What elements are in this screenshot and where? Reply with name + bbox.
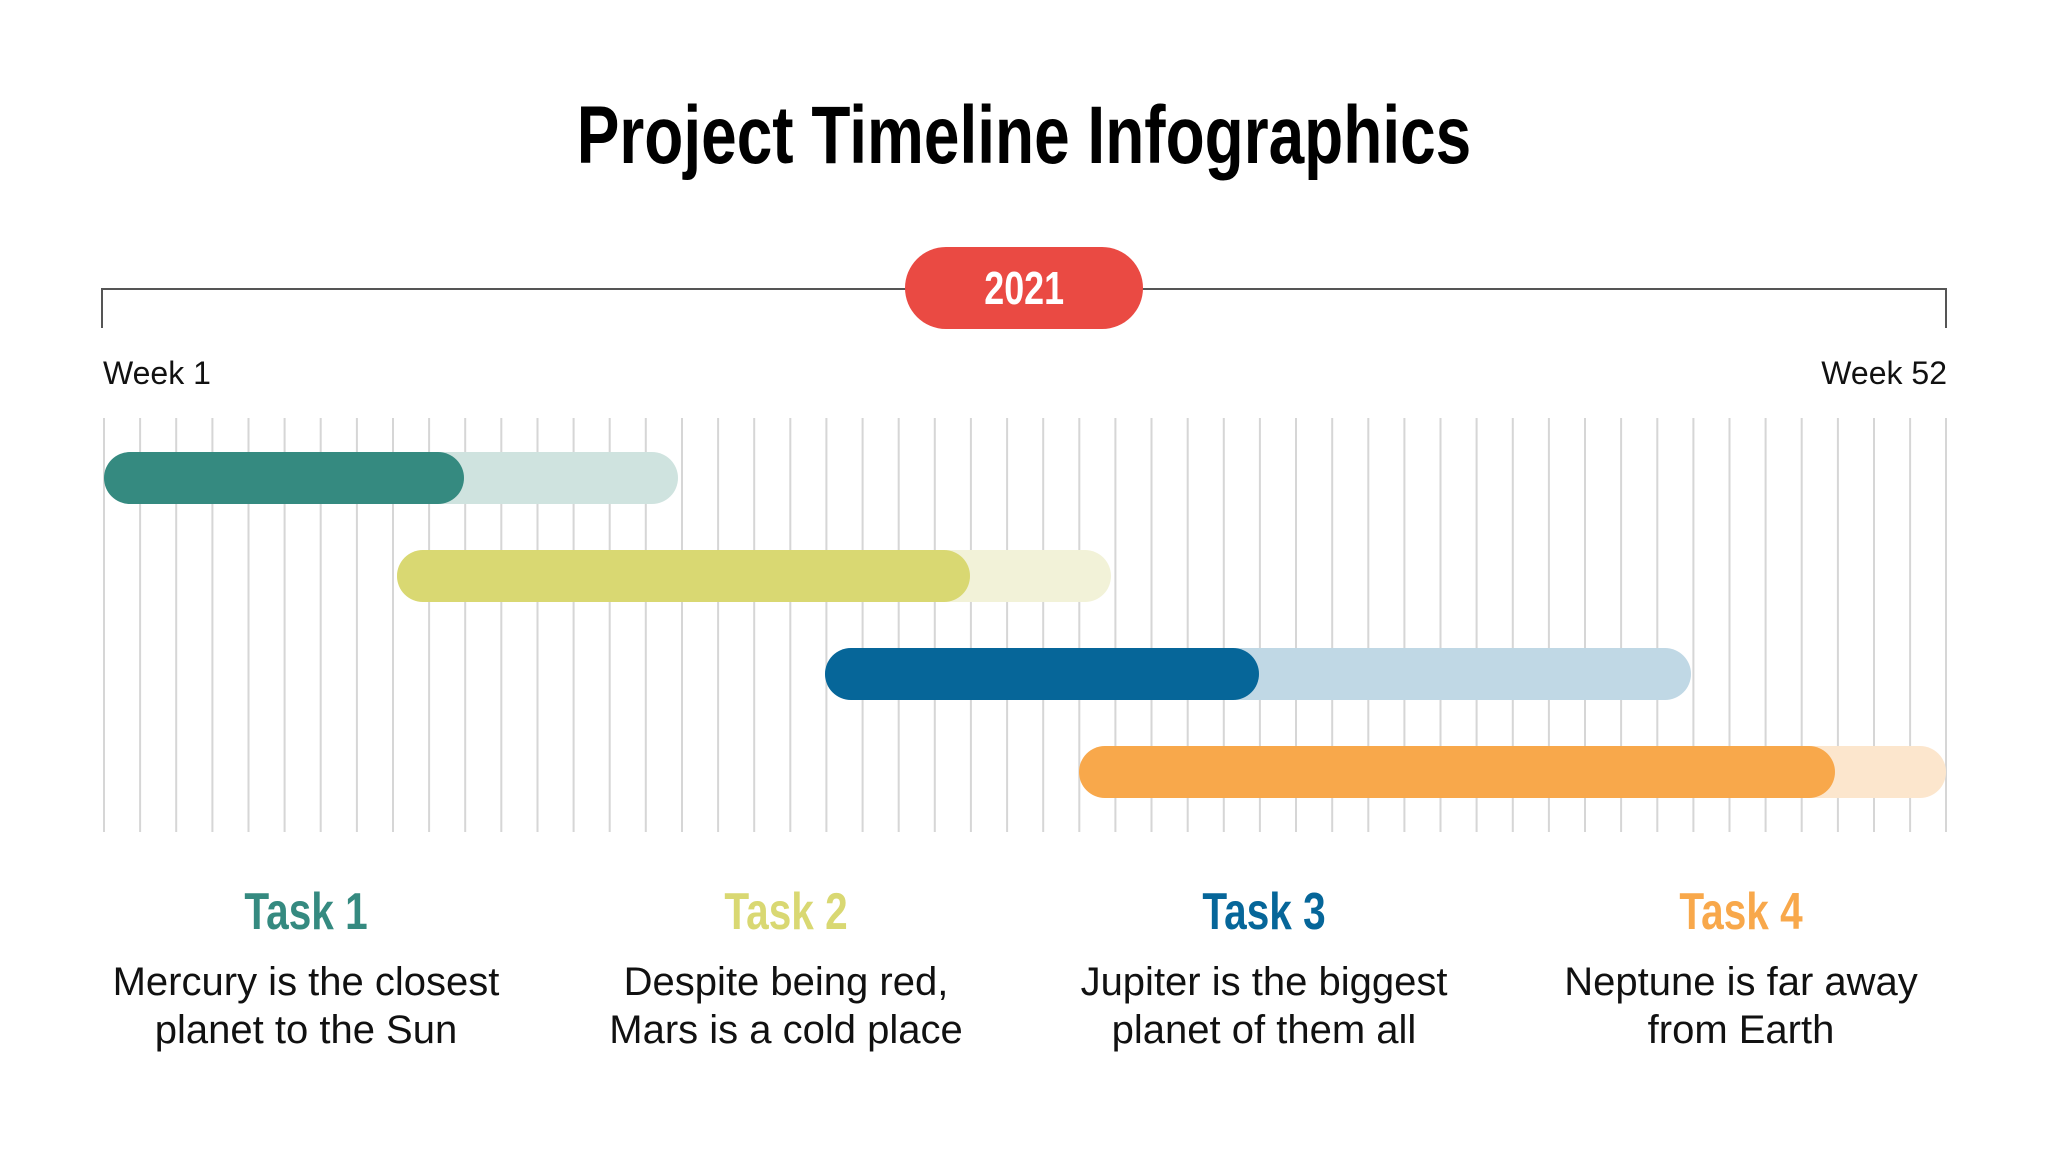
bar: task 4 — [1079, 746, 1946, 798]
task 2 text — [609, 883, 963, 1052]
task 4 text — [1564, 883, 1918, 1052]
title: Project Timeline Infographics — [577, 90, 1471, 181]
task 3 text: Jupiter is the biggest — [1081, 960, 1447, 1004]
grid — [103, 418, 1947, 832]
task 3 text: Task 3 — [1202, 883, 1326, 941]
task 2 text: Task 2 — [724, 883, 848, 941]
task 1 text: Mercury is the closest — [113, 960, 499, 1004]
task 1 text: planet to the Sun — [155, 1008, 457, 1052]
year pill: 2021 — [984, 262, 1064, 314]
task 3 text: planet of them all — [1112, 1008, 1416, 1052]
task 4 text: Task 4 — [1679, 883, 1803, 941]
timeline bracket — [101, 288, 1947, 328]
label: week 1: Week 1 — [103, 355, 211, 391]
task 2 text: Mars is a cold place — [609, 1008, 963, 1052]
task 3 text — [1081, 883, 1448, 1052]
task 4 text: Neptune is far away — [1564, 960, 1918, 1004]
task 1 text: Task 1 — [244, 883, 368, 941]
bar: task 2 — [397, 550, 1111, 602]
task 2 text: Despite being red, — [624, 960, 948, 1004]
bar: task 3 — [825, 648, 1691, 700]
bar: task 1 — [104, 452, 678, 504]
label: week 52: Week 52 — [1821, 355, 1947, 391]
task 1 text — [113, 883, 500, 1052]
task 4 text: from Earth — [1648, 1008, 1834, 1052]
year pill — [905, 247, 1143, 329]
